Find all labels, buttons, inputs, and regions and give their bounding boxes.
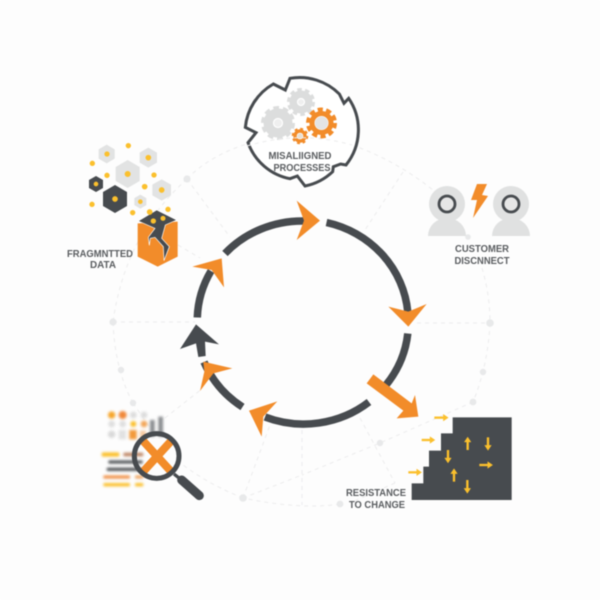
- label: resistance to change: [346, 487, 406, 511]
- background dashed network: [113, 143, 490, 506]
- panel: resistance to change: [346, 414, 512, 511]
- icon: lightning bolt: [471, 184, 488, 218]
- panel: fragmented data: [67, 143, 178, 271]
- cracked cube: [138, 207, 178, 267]
- hexagon cluster: [89, 143, 171, 215]
- label: misaligned processes: [268, 150, 332, 174]
- panel: customer disconnect: [428, 184, 530, 267]
- panel: data inspection magnifier: [102, 411, 199, 496]
- gears: [264, 90, 334, 142]
- icon: left person: [428, 186, 466, 236]
- blurred data grid: [102, 411, 163, 486]
- label: misaligned processes: PROCESSES: [274, 162, 330, 174]
- icon: magnifier: [134, 434, 199, 496]
- broken circle outline: [245, 77, 358, 186]
- label: customer disconnect: [454, 243, 510, 267]
- cycle arrowheads: [180, 201, 427, 437]
- cycle arc segments: [197, 221, 408, 424]
- label: resistance to change: TO CHANGE: [349, 499, 405, 511]
- panel: misaligned processes: [245, 77, 358, 186]
- label: customer disconnect: DISCNNECT: [454, 255, 510, 267]
- stair block with arrows: [408, 414, 512, 500]
- network nodes: [109, 175, 494, 507]
- label: misaligned processes: MISALIIGNED: [268, 150, 332, 162]
- central cycle: [180, 201, 427, 437]
- icon: right person: [492, 186, 530, 236]
- faint arc across panel: [247, 138, 352, 146]
- label: fragmented data: [67, 248, 133, 271]
- label: resistance to change: RESISTANCE: [346, 487, 406, 499]
- label: customer disconnect: CUSTOMER: [455, 243, 509, 255]
- icon: orange X: [142, 439, 173, 473]
- label: fragmented data: FRAGMNTTED: [67, 248, 133, 260]
- label: fragmented data: DATA: [90, 259, 116, 271]
